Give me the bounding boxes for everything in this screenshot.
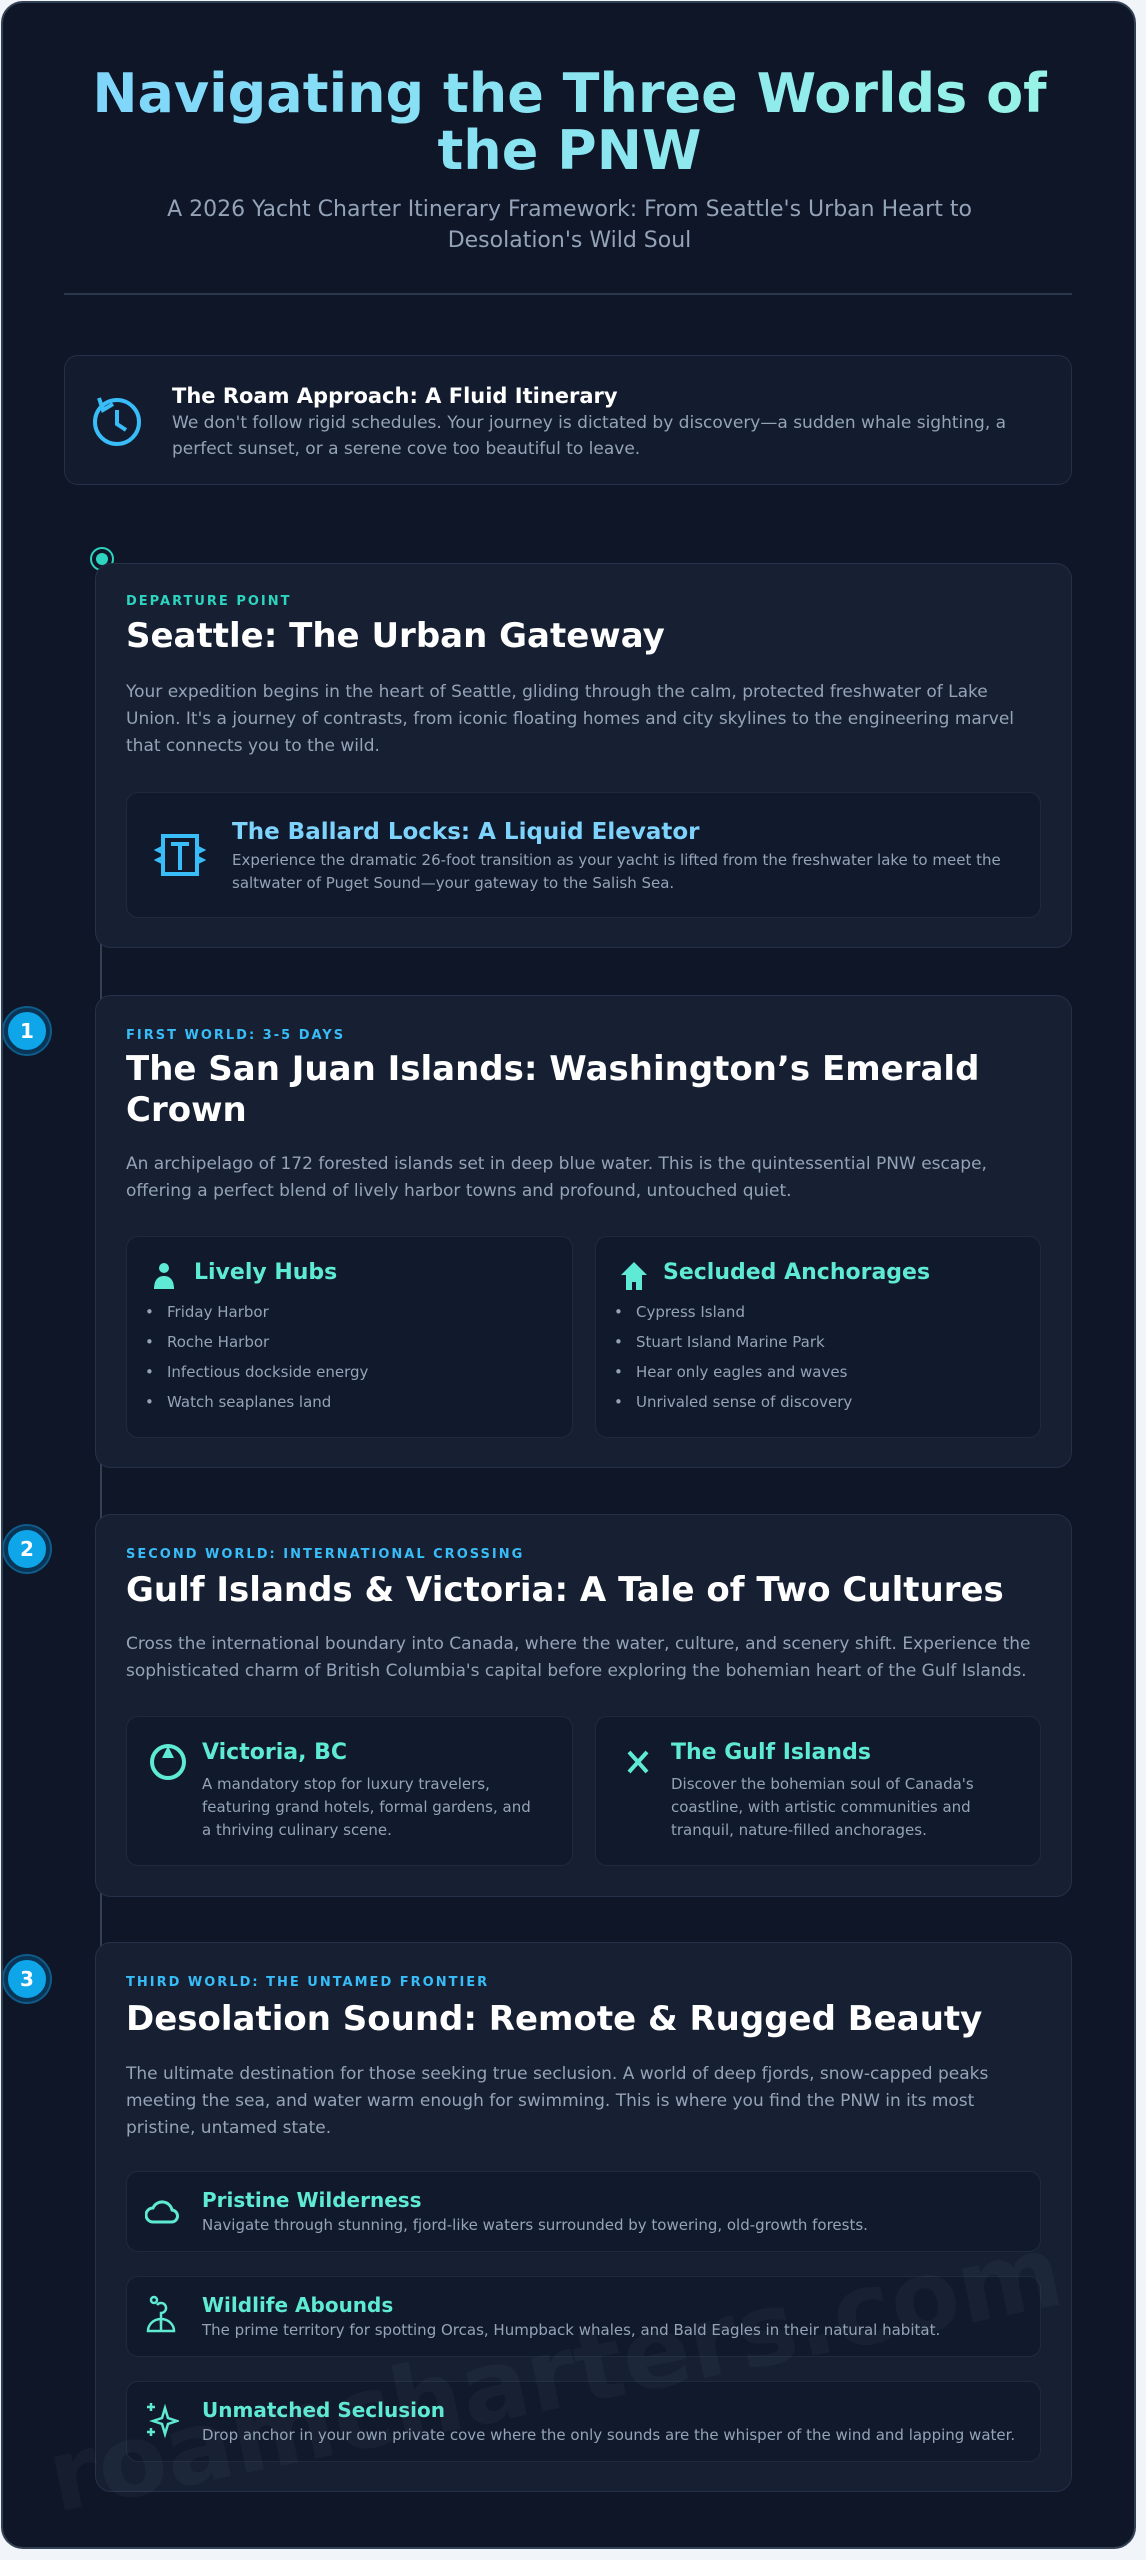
icon: compass [150,1744,186,1780]
badge 1: 1 [20,1019,34,1043]
feature: wildlife: The prime territory for spotting Orcas, Humpback whales, and Bald Eagles in their natural habitat. [202,2321,940,2339]
panel: lively hubs: Lively Hubs [194,1260,337,1285]
badge 3: 3 [20,1967,34,1991]
panel: desolation sound: THIRD WORLD: THE UNTAMED FRONTIER [126,1975,489,1990]
list: Watch seaplanes land [167,1393,331,1411]
panel: secluded anchorages [595,1236,1041,1438]
text: An archipelago of 172 forested islands set in deep blue water. This is the quintessential PNW escape, offering a perfect blend of lively harbor towns and profound, untouched quiet. [126,1154,987,1201]
feature: pristine wilderness: Navigate through stunning, fjord-like waters surrounded by towering, old-growth forests. [202,2216,868,2234]
icon: wildlife [146,2296,176,2332]
panel: secluded anchorages: Stuart Island Marine Park [636,1333,825,1351]
heading: The San Juan Islands: Washington’s Emerald Crown [126,1049,979,1130]
panel: gulf islands [95,1514,1072,1897]
panel: san juan: FIRST WORLD: 3-5 DAYS [126,1028,345,1043]
feature: pristine wilderness: Pristine Wilderness [202,2188,422,2212]
panel: seattle [95,563,1072,948]
title [3,65,1136,179]
panel: victoria: Victoria, BC [202,1740,347,1765]
subtitle: A 2026 Yacht Charter Itinerary Framework: From Seattle's Urban Heart to Desolation's Wild Soul [167,197,972,253]
icon: history clock [93,397,141,446]
icon: locks [154,834,206,876]
text: The ultimate destination for those seeking true seclusion. A world of deep fjords, snow-capped peaks meeting the sea, and water warm enough for swimming. This is where you find the PNW in its most pristine, untamed state. [126,2064,988,2138]
panel: desolation sound [95,1942,1072,2492]
icon: departure dot [90,547,114,571]
feature: wildlife [126,2276,1041,2357]
label: DEPARTURE POINT [126,594,292,609]
heading: The Roam Approach: A Fluid Itinerary [172,384,618,408]
text: Your expedition begins in the heart of Seattle, gliding through the calm, protected freshwater of Lake Union. It's a journey of contrasts, from iconic floating homes and city skylines to the engineering marvel that connects you to the wild. [126,682,1014,756]
feature: seclusion: Drop anchor in your own private cove where the only sounds are the whisper of the wind and lapping water. [202,2426,1015,2444]
panel: victoria [126,1716,573,1866]
icon: sparkles [147,2403,179,2438]
heading: Gulf Islands & Victoria: A Tale of Two Cultures [126,1570,1004,1610]
feature: pristine wilderness [126,2171,1041,2252]
panel: gulf islands sub: The Gulf Islands [671,1740,871,1765]
panel: gulf islands sub [595,1716,1041,1866]
panel: victoria: A mandatory stop for luxury travelers, featuring grand hotels, formal gardens, and a thriving culinary scene. [202,1775,531,1839]
panel: gulf islands: SECOND WORLD: INTERNATIONAL CROSSING [126,1547,524,1562]
watermark: roamcharters.com [38,2212,1072,2536]
panel: secluded anchorages: Unrivaled sense of discovery [636,1393,852,1411]
panel: secluded anchorages: Hear only eagles and waves [636,1363,847,1381]
list: Roche Harbor [167,1333,269,1351]
panel: lively hubs [126,1236,573,1438]
feature: seclusion: Unmatched Seclusion [202,2398,445,2422]
heading: Desolation Sound: Remote & Rugged Beauty [126,1999,982,2039]
feature: wildlife: Wildlife Abounds [202,2293,393,2317]
icon: cloud [145,2200,179,2224]
heading: Seattle: The Urban Gateway [126,616,665,656]
text: We don't follow rigid schedules. Your journey is dictated by discovery—a sudden whale sighting, a perfect sunset, or a serene cove too beautiful to leave. [172,413,1006,459]
panel: secluded anchorages: Secluded Anchorages [663,1260,930,1285]
feature: seclusion [126,2381,1041,2462]
panel: roam approach [64,355,1072,485]
icon: person [154,1263,174,1289]
list [147,1303,368,1411]
badge 2: 2 [20,1537,34,1561]
text: Experience the dramatic 26-foot transition as your yacht is lifted from the freshwater lake to meet the saltwater of Puget Sound—your gateway to the Salish Sea. [232,851,1001,892]
list: Infectious dockside energy [167,1363,368,1381]
text: Cross the international boundary into Canada, where the water, culture, and scenery shift. Experience the sophisticated charm of British Columbia's capital before exploring the bohemian heart of the Gulf Islands. [126,1634,1030,1681]
badge 2 [4,1526,50,1572]
callout: ballard locks [126,792,1041,918]
list: Friday Harbor [167,1303,269,1321]
icon: home [621,1262,647,1290]
heading: The Ballard Locks: A Liquid Elevator [232,819,700,845]
badge 3 [4,1956,50,2002]
title: the PNW [437,119,702,182]
panel: gulf islands sub: Discover the bohemian soul of Canada's coastline, with artistic communities and tranquil, nature-filled anchorages. [671,1775,974,1839]
panel: san juan [95,995,1072,1468]
title: Navigating the Three Worlds of [92,62,1047,125]
panel: secluded anchorages: Cypress Island [636,1303,745,1321]
icon: cross [628,1750,648,1774]
badge 1 [4,1008,50,1054]
